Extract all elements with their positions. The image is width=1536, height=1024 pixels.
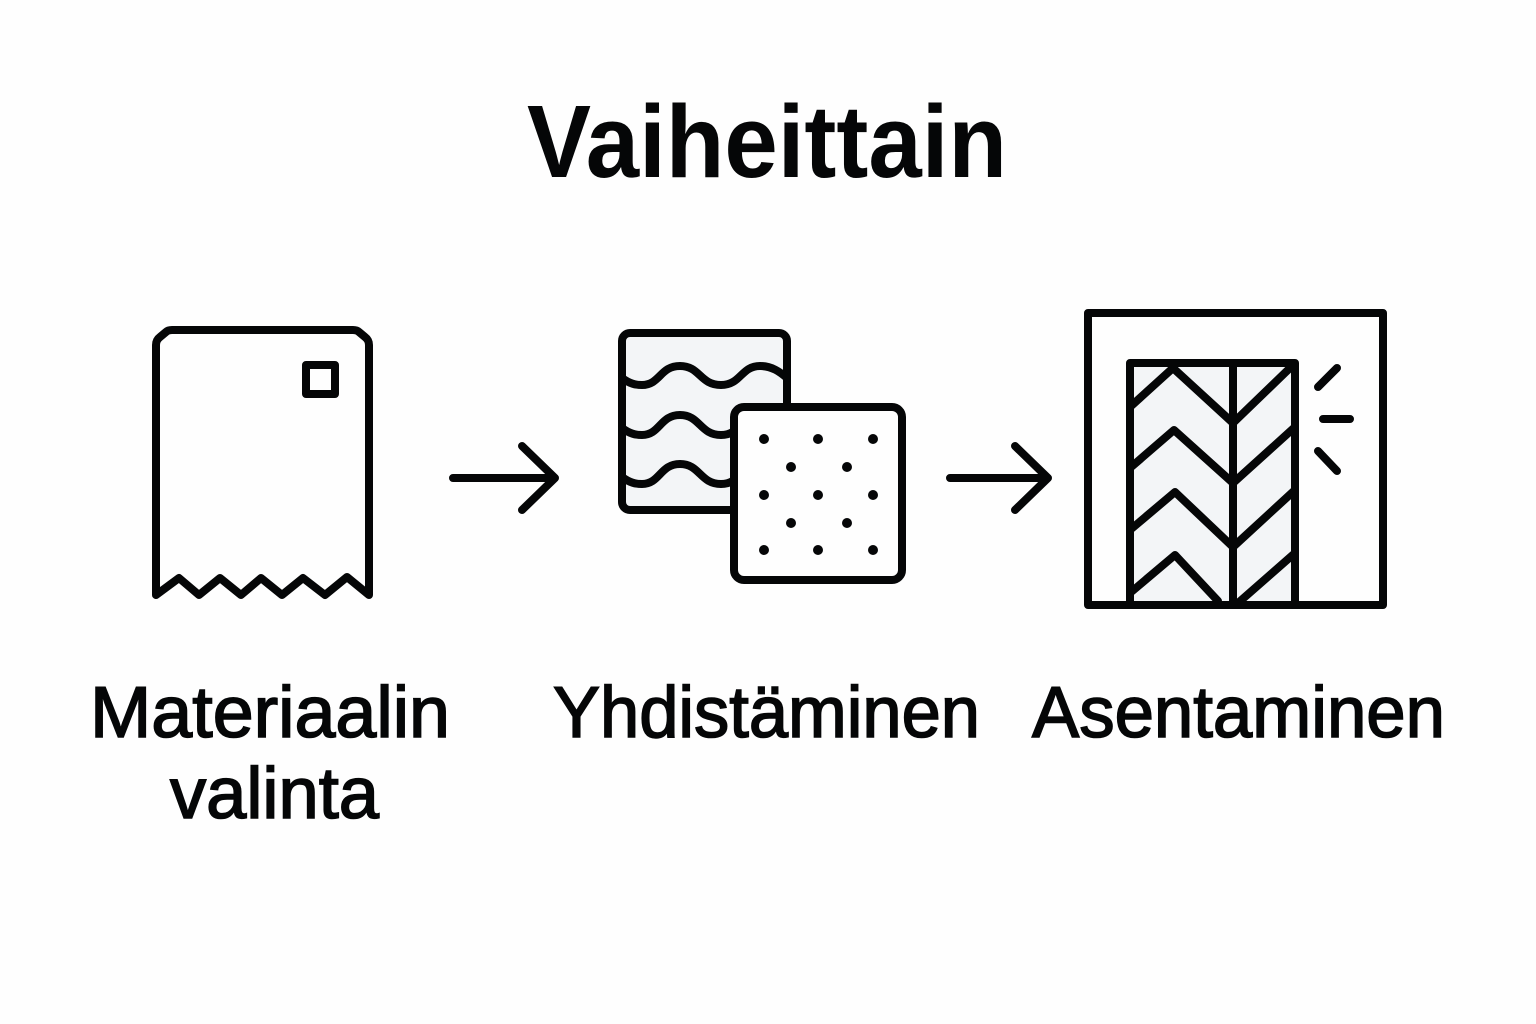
label: step one — [90, 673, 450, 834]
outer frame — [1088, 313, 1383, 605]
label: step one: Materiaalin — [90, 673, 450, 753]
icon: material sheet with torn edge — [156, 330, 369, 595]
small square mark — [306, 365, 335, 394]
icon: installed herringbone panel in frame — [1088, 313, 1383, 605]
label: step one: valinta — [170, 754, 380, 834]
spark lines — [1318, 368, 1350, 471]
icon: two combined material layers — [622, 333, 902, 580]
sheet outline — [156, 330, 369, 595]
herringbone panel — [1130, 363, 1295, 605]
label: step three: Asentaminen — [1032, 673, 1445, 753]
arrow: step two to step three — [950, 446, 1048, 510]
back layer with waves — [622, 333, 787, 510]
title: Vaiheittain — [527, 84, 1007, 199]
arrow: step one to step two — [453, 446, 555, 510]
label: step two: Yhdistäminen — [553, 673, 980, 753]
front layer with dots — [734, 407, 902, 580]
